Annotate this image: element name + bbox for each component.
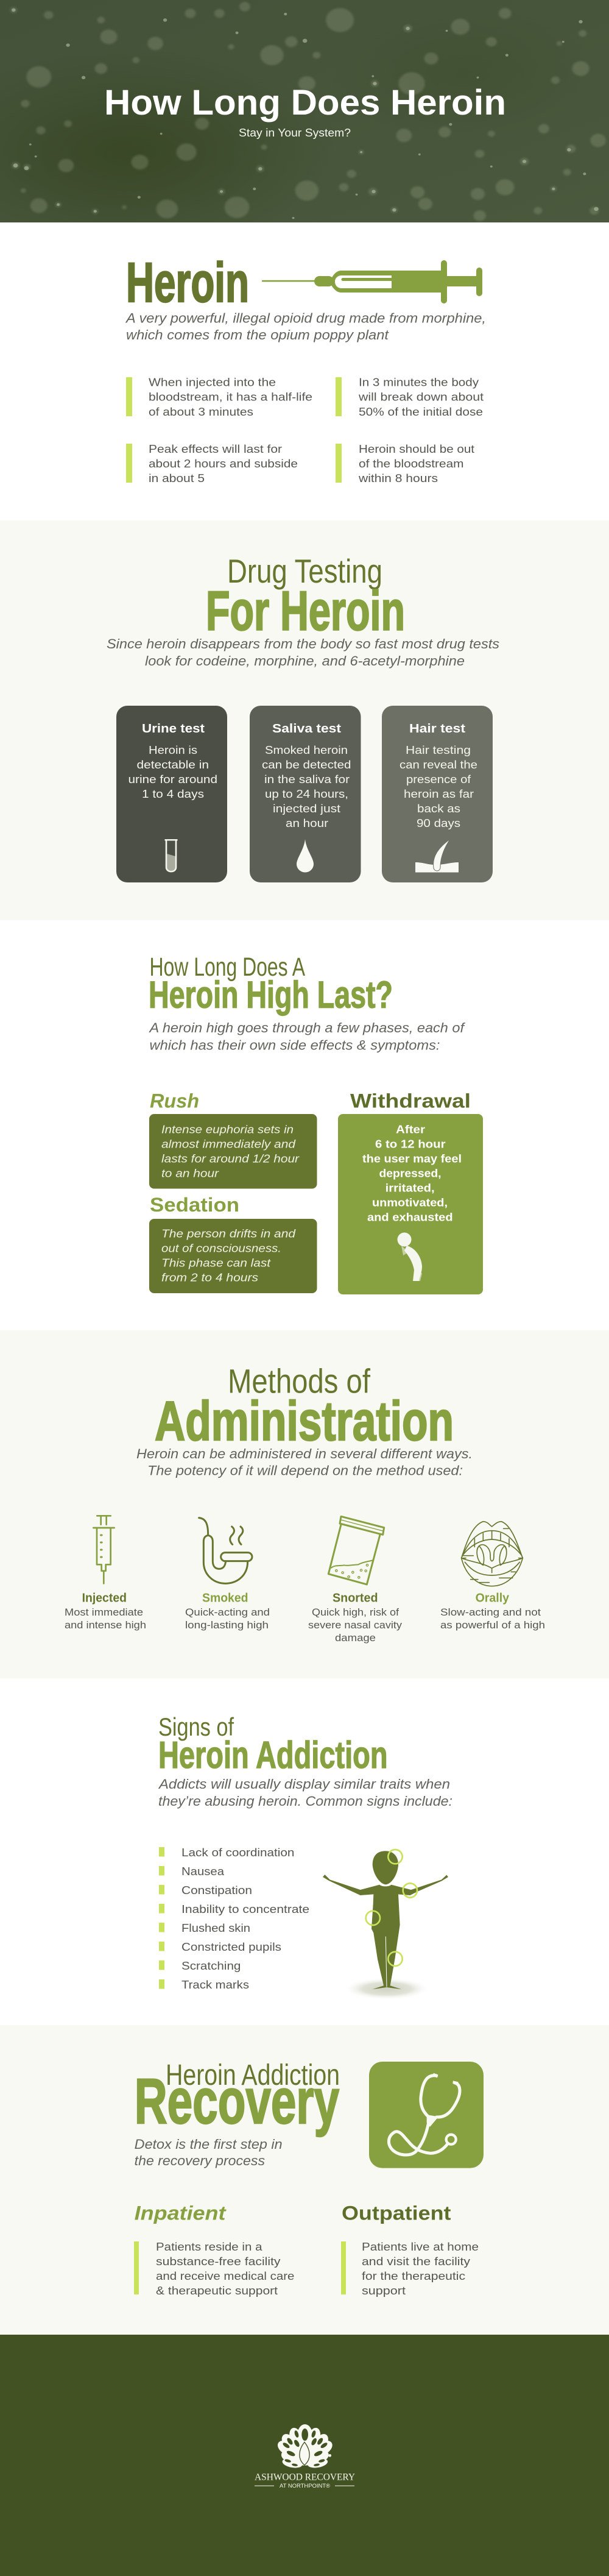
card: saliva test: [250, 706, 361, 882]
list: common signs: Scratching: [181, 1960, 241, 1972]
fact: breakdown: [336, 377, 484, 418]
phase: sedation: from 2 to 4 hours: [161, 1271, 258, 1283]
fact: peak effects: [126, 443, 298, 484]
method: smoked: [185, 1518, 270, 1631]
description: which has their own side effects & symptoms:: [150, 1037, 440, 1053]
card: saliva test: an hour: [286, 817, 328, 829]
heading: Heroin Addiction: Heroin Addiction: [166, 2059, 340, 2092]
method: snorted: Snorted: [333, 1592, 378, 1605]
title: How Long Does Heroin: [104, 83, 506, 122]
method: snorted: damage: [335, 1632, 376, 1644]
panel: drug testing: [0, 520, 609, 920]
phase: rush: almost immediately and: [161, 1138, 296, 1150]
fact: breakdown: 50% of the initial dose: [359, 406, 483, 418]
heading: Heroin Addiction: Heroin Addiction: [158, 1734, 387, 1776]
logo: Ashwood Recovery: ASHWOOD RECOVERY: [255, 2472, 355, 2483]
description: A heroin high goes through a few phases, each of: [148, 1020, 466, 1035]
description: [135, 2137, 283, 2168]
panel: methods of administration: [0, 1330, 609, 1678]
card: hair test: presence of: [406, 773, 471, 786]
card: urine test: Heroin is: [149, 744, 197, 756]
option: outpatient: for the therapeutic: [362, 2270, 465, 2282]
method: orally: Slow-acting and not: [440, 1606, 541, 1618]
heading: Methods of: Methods of: [228, 1362, 370, 1400]
option: inpatient: Inpatient: [135, 2202, 227, 2224]
fact: out of bloodstream: within 8 hours: [358, 472, 438, 484]
option: outpatient: [341, 2202, 479, 2297]
description: Heroin can be administered in several different ways.: [136, 1446, 473, 1461]
icon: syringe: [262, 260, 482, 303]
description: Addicts will usually display similar traits when: [158, 1776, 450, 1792]
method: injected: Injected: [82, 1592, 127, 1605]
fact: peak effects: in about 5: [149, 472, 205, 484]
card: hair test: 90 days: [417, 817, 460, 829]
phase: rush: Intense euphoria sets in: [161, 1124, 294, 1136]
fact: breakdown: will break down about: [358, 391, 484, 403]
card: saliva test: injected just: [273, 803, 340, 815]
phase: withdrawal: After: [396, 1124, 425, 1136]
panel: recovery: [0, 2025, 609, 2335]
fact: out of bloodstream: of the bloodstream: [359, 458, 464, 470]
method: injected: Most immediate: [65, 1606, 143, 1618]
heading: For Heroin: For Heroin: [206, 580, 405, 642]
option: inpatient: & therapeutic support: [156, 2285, 278, 2297]
fact: half-life: of about 3 minutes: [149, 406, 253, 418]
description: [107, 636, 499, 669]
description: [148, 1020, 466, 1053]
card: urine test: Urine test: [142, 722, 205, 736]
option: outpatient: Outpatient: [342, 2202, 451, 2224]
method: smoked: long-lasting high: [185, 1619, 269, 1631]
heading: Heroin: Heroin: [126, 252, 249, 314]
icon: drop: [297, 839, 314, 873]
icon: stethoscope: [369, 2062, 484, 2168]
panel: signs of addiction: [0, 1678, 609, 2025]
description: Detox is the first step in: [135, 2137, 283, 2152]
list: common signs: Nausea: [181, 1865, 225, 1878]
list: common signs: Constipation: [181, 1884, 252, 1897]
phase: sedation: out of consciousness.: [161, 1243, 281, 1255]
description: Since heroin disappears from the body so fast most drug tests: [107, 636, 499, 651]
icon: human figure with marked areas: [323, 1850, 448, 2000]
option: inpatient: and receive medical care: [156, 2270, 294, 2282]
phase: rush: Rush: [150, 1090, 199, 1112]
method: snorted: [308, 1516, 403, 1644]
description: look for codeine, morphine, and 6-acetyl-morphine: [145, 653, 465, 669]
phase: rush: [149, 1090, 317, 1188]
phase: sedation: This phase can last: [161, 1257, 271, 1269]
description: [125, 311, 486, 342]
method: injected: [65, 1516, 146, 1631]
logo: Ashwood Recovery: [255, 2424, 355, 2489]
heading: Heroin High Last?: Heroin High Last?: [149, 974, 393, 1017]
phase: rush: lasts for around 1/2 hour: [161, 1153, 300, 1165]
card: hair test: can reveal the: [400, 759, 477, 771]
method: smoked: Smoked: [202, 1592, 248, 1605]
phase: withdrawal: irritated,: [385, 1182, 435, 1194]
fact: breakdown: In 3 minutes the body: [359, 377, 479, 389]
fact: out of bloodstream: Heroin should be out: [359, 443, 474, 455]
card: hair test: Hair test: [409, 722, 465, 736]
description: A very powerful, illegal opioid drug made from morphine,: [125, 311, 486, 325]
option: inpatient: substance-free facility: [156, 2255, 280, 2268]
card: saliva test: Saliva test: [272, 722, 341, 736]
method: snorted: Quick high, risk of: [312, 1606, 399, 1618]
panel: heroin overview: [0, 222, 609, 520]
method: injected: and intense high: [65, 1619, 146, 1631]
phase: withdrawal: depressed,: [379, 1168, 441, 1180]
phase: withdrawal: the user may feel: [362, 1153, 462, 1165]
fact: half-life: bloodstream, it has a half-life: [149, 391, 312, 403]
list: common signs: Flushed skin: [181, 1922, 250, 1934]
list: common signs: Constricted pupils: [181, 1941, 281, 1953]
description: The potency of it will depend on the method used:: [147, 1463, 463, 1478]
icon: hair follicle: [415, 839, 459, 873]
method: snorted: severe nasal cavity: [308, 1619, 403, 1631]
description: [136, 1446, 473, 1478]
phase: withdrawal: unmotivated,: [372, 1197, 448, 1209]
icon: test tube: [164, 839, 178, 871]
list: common signs: Track marks: [181, 1979, 249, 1991]
list: common signs: Lack of coordination: [181, 1847, 294, 1859]
icon: bent-over person: [397, 1232, 422, 1281]
fact: peak effects: Peak effects will last for: [149, 443, 282, 455]
icon: syringe outline: [93, 1516, 114, 1583]
phase: withdrawal: 6 to 12 hour: [375, 1138, 446, 1150]
card: saliva test: up to 24 hours,: [265, 788, 348, 800]
phase: withdrawal: and exhausted: [367, 1212, 453, 1224]
option: inpatient: [134, 2202, 294, 2297]
option: outpatient: support: [362, 2285, 406, 2297]
subtitle: Stay in Your System?: [239, 127, 351, 139]
phase: rush: to an hour: [161, 1168, 219, 1180]
card: saliva test: in the saliva for: [264, 773, 350, 786]
heading: Drug Testing: Drug Testing: [227, 552, 382, 590]
icon: pipe: [199, 1518, 252, 1583]
panel: how long a high lasts: [0, 920, 609, 1330]
card: hair test: heroin as far: [404, 788, 474, 800]
phase: withdrawal: Withdrawal: [350, 1090, 471, 1112]
description: the recovery process: [135, 2153, 265, 2168]
card: hair test: [382, 706, 493, 882]
icon: open mouth: [462, 1522, 523, 1586]
method: orally: Orally: [476, 1592, 510, 1605]
card: saliva test: can be detected: [262, 759, 351, 771]
card: urine test: [116, 706, 227, 882]
list: common signs: Inability to concentrate: [181, 1903, 309, 1915]
heading: Administration: Administration: [155, 1391, 454, 1452]
method: orally: as powerful of a high: [440, 1619, 545, 1631]
icon: powder bag: [328, 1516, 384, 1584]
method: smoked: Quick-acting and: [185, 1606, 270, 1618]
logo: Ashwood Recovery: AT NORTHPOINT®: [280, 2483, 330, 2489]
phase: withdrawal: [338, 1090, 483, 1294]
heading: Recovery: Recovery: [135, 2066, 339, 2137]
option: outpatient: and visit the facility: [362, 2255, 470, 2268]
panel: footer: [0, 2335, 609, 2576]
description: they’re abusing heroin. Common signs include:: [158, 1794, 452, 1809]
fact: out of bloodstream: [336, 443, 474, 484]
method: orally: [440, 1522, 545, 1631]
fact: half-life: [126, 377, 312, 418]
heading: How Long Does A: How Long Does A: [150, 953, 305, 982]
phase: sedation: The person drifts in and: [161, 1227, 296, 1240]
fact: peak effects: about 2 hours and subside: [149, 458, 298, 470]
card: urine test: detectable in: [136, 759, 209, 771]
option: outpatient: Patients live at home: [362, 2241, 479, 2253]
description: which comes from the opium poppy plant: [126, 327, 389, 342]
card: hair test: Hair testing: [406, 744, 471, 756]
phase: sedation: Sedation: [150, 1194, 239, 1216]
card: urine test: 1 to 4 days: [142, 788, 204, 800]
option: inpatient: Patients reside in a: [156, 2241, 263, 2253]
panel: hero banner: [0, 0, 609, 256]
list: common signs: [159, 1847, 309, 1991]
card: hair test: back as: [417, 803, 460, 815]
description: [158, 1776, 452, 1809]
card: urine test: urine for around: [128, 773, 217, 786]
phase: sedation: [149, 1194, 317, 1293]
card: saliva test: Smoked heroin: [265, 744, 348, 756]
heading: Signs of: Signs of: [158, 1712, 234, 1741]
fact: half-life: When injected into the: [149, 377, 276, 389]
